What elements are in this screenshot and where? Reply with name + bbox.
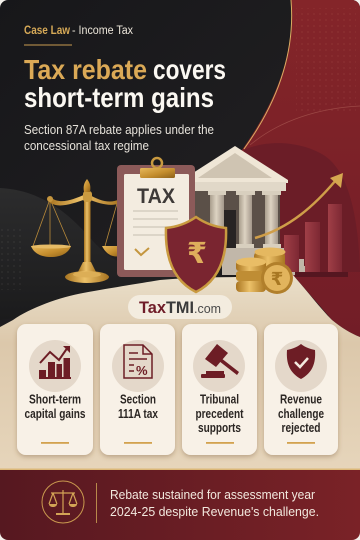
card: revenue challenge rejected: Revenue — [280, 392, 322, 406]
footer gold rule — [0, 468, 360, 470]
footer text: Rebate sustained for assessment year — [110, 487, 316, 502]
footer band — [0, 470, 360, 540]
card: tribunal precedent supports: supports — [198, 421, 241, 435]
clipboard with TAX sheet — [117, 158, 195, 277]
background: grey dot texture — [2, 230, 20, 290]
footer divider — [96, 483, 97, 523]
card: section 111A tax: 111A tax — [118, 407, 158, 421]
dark red circle — [244, 143, 360, 272]
icon: gavel — [201, 344, 239, 378]
clipboard with TAX sheet: TAX — [137, 185, 175, 208]
footer text: 2024-25 despite Revenue's challenge. — [110, 504, 319, 519]
gold curve — [244, 0, 292, 149]
logo pill: Tax — [139, 298, 167, 317]
background: red panel — [242, 0, 360, 337]
subtitle: concessional tax regime — [24, 138, 149, 153]
icon: tax document: % — [136, 363, 148, 378]
shield with rupee — [166, 217, 226, 292]
card: revenue challenge rejected: challenge — [278, 407, 324, 421]
card: tribunal precedent supports: Tribunal — [200, 392, 239, 406]
tag line — [24, 26, 133, 34]
tag line: Case Law — [24, 25, 70, 37]
tag underline — [24, 44, 72, 46]
card: tribunal precedent supports: precedent — [196, 407, 244, 421]
title: short-term gains — [24, 82, 214, 113]
shield with rupee: ₹ — [187, 236, 207, 270]
subtitle: Section 87A rebate applies under the — [24, 122, 214, 137]
icon: rising bars — [39, 346, 71, 379]
gold coin stacks: ₹ — [271, 269, 283, 290]
building: classical court — [195, 146, 305, 275]
title — [24, 54, 226, 113]
title: Tax rebate — [24, 54, 147, 85]
bar chart with rising arrow — [255, 173, 348, 277]
cream panel — [0, 275, 360, 470]
footer text — [110, 490, 318, 518]
icon: shield check — [287, 344, 315, 379]
logo pill: TMI — [166, 298, 194, 317]
red dot texture — [296, 8, 356, 113]
tag line: - Income Tax — [72, 25, 133, 37]
card: short-term capital gains: capital gains — [24, 407, 86, 421]
card: short-term capital gains: Short-term — [29, 392, 81, 406]
logo pill: .com — [194, 301, 221, 316]
card: revenue challenge rejected: rejected — [282, 421, 320, 435]
card: revenue challenge rejected — [264, 324, 338, 455]
background: lighter swoosh — [0, 188, 95, 254]
card: tribunal precedent supports — [182, 324, 257, 455]
subtitle — [24, 124, 214, 152]
icon: golden scales — [31, 179, 122, 283]
logo pill — [128, 295, 232, 319]
background: dark panel — [0, 0, 360, 345]
gold coin stacks — [236, 248, 293, 294]
title: covers — [153, 54, 226, 85]
icon: footer scales badge — [42, 481, 84, 523]
card: short-term capital gains — [17, 324, 93, 455]
red panel arc line — [250, 106, 360, 145]
card: section 111A tax — [100, 324, 175, 455]
card: section 111A tax: Section — [120, 392, 156, 406]
